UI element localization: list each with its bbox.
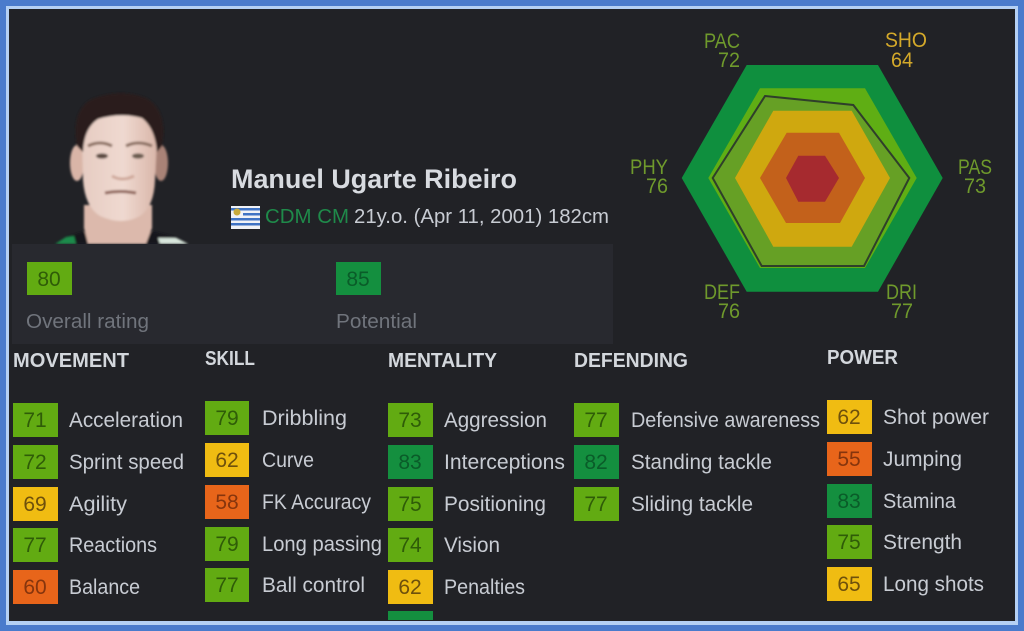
panel: movement: MOVEMENT <box>13 350 129 372</box>
icon: Uruguay flag <box>231 206 260 229</box>
radar label: PHY: PHY <box>630 156 668 179</box>
panel: skill: FK Accuracy <box>262 491 371 514</box>
radar label: PAC: 72 <box>718 49 740 72</box>
panel: skill: 79 <box>215 407 239 430</box>
panel: skill: 62 <box>215 449 239 472</box>
panel: power: 55 <box>837 448 861 471</box>
panel: mentality: Interceptions <box>444 451 565 474</box>
radar label: PHY: 76 <box>646 175 668 198</box>
radar label: PAS <box>958 156 992 198</box>
panel: mentality: Penalties <box>444 576 525 599</box>
panel: defending: Defensive awareness <box>631 409 820 432</box>
panel: mentality: Positioning <box>444 493 546 516</box>
radar label: SHO: 64 <box>891 49 913 72</box>
panel: power: Jumping <box>883 448 962 471</box>
panel: mentality: Aggression <box>444 409 547 432</box>
panel: mentality: Vision <box>444 534 500 557</box>
panel: skill: SKILL <box>205 348 255 370</box>
panel: defending: 77 <box>584 493 608 516</box>
panel: skill: 58 <box>215 491 239 514</box>
radar label: PAS: PAS <box>958 156 992 179</box>
panel: power: Stamina <box>883 490 956 513</box>
overall rating <box>26 262 149 333</box>
panel: mentality: 62 <box>398 576 422 599</box>
panel: skill: Ball control <box>262 574 365 597</box>
panel: movement: Reactions <box>69 534 157 557</box>
radar label: SHO: SHO <box>885 29 927 52</box>
panel: power: 83 <box>837 490 861 513</box>
panel: power: Long shots <box>883 573 984 596</box>
panel: defending: 82 <box>584 451 608 474</box>
player meta line: 21y.o. (Apr 11, 2001) 182cm <box>354 206 609 228</box>
panel: movement: 69 <box>23 493 47 516</box>
radar label: PAC: PAC <box>704 30 740 53</box>
panel: power: POWER <box>827 347 899 369</box>
radar label: DEF <box>704 281 740 323</box>
overall rating: 80 <box>37 268 61 291</box>
radar label: DEF: DEF <box>704 281 740 304</box>
radar label: PHY <box>630 156 668 198</box>
panel: movement: Balance <box>69 576 140 599</box>
panel: movement: 60 <box>23 576 47 599</box>
panel: skill: Dribbling <box>262 407 347 430</box>
potential: 85 <box>346 268 370 291</box>
panel: defending: 77 <box>584 409 608 432</box>
panel: ratings <box>12 244 613 344</box>
radar label: SHO <box>885 29 927 72</box>
panel: movement: 77 <box>23 534 47 557</box>
overall rating: Overall rating <box>26 311 149 333</box>
panel: movement: Sprint speed <box>69 451 184 474</box>
panel: mentality <box>388 350 565 620</box>
panel: movement: 71 <box>23 409 47 432</box>
potential <box>336 262 417 333</box>
radar label: PAC <box>704 30 740 72</box>
player meta line: CDM CM <box>265 206 349 228</box>
panel: skill: 77 <box>215 574 239 597</box>
panel: defending: DEFENDING <box>574 350 688 372</box>
panel: mentality: 73 <box>398 409 422 432</box>
panel: power: Shot power <box>883 406 989 429</box>
panel: power: Strength <box>883 531 962 554</box>
panel: defending: Standing tackle <box>631 451 772 474</box>
radar label: DRI: 77 <box>891 300 913 323</box>
panel: mentality: 75 <box>398 493 422 516</box>
panel: defending: Sliding tackle <box>631 493 753 516</box>
player photo <box>55 93 189 244</box>
panel: defending <box>574 350 820 521</box>
radar label: DRI: DRI <box>886 281 917 304</box>
panel: mentality: MENTALITY <box>388 350 498 372</box>
panel: mentality: 83 <box>398 451 422 474</box>
panel: movement: 72 <box>23 451 47 474</box>
panel: power: 62 <box>837 406 861 429</box>
panel: movement <box>13 350 184 604</box>
panel: power <box>827 347 989 601</box>
potential: Potential <box>336 311 417 333</box>
player meta line <box>231 206 609 229</box>
radar label: DEF: 76 <box>718 300 740 323</box>
panel: movement: Agility <box>69 493 128 516</box>
panel: skill: 79 <box>215 533 239 556</box>
panel: skill: Long passing <box>262 533 382 556</box>
radar label: PAS: 73 <box>964 175 986 198</box>
panel: power: 75 <box>837 531 861 554</box>
panel: power: 65 <box>837 573 861 596</box>
panel: movement: Acceleration <box>69 409 183 432</box>
radar label: DRI <box>886 281 917 323</box>
panel: mentality: 74 <box>398 534 422 557</box>
radar chart <box>682 65 943 292</box>
panel: skill: Curve <box>262 449 314 472</box>
player name: Manuel Ugarte Ribeiro <box>231 164 517 194</box>
panel: skill <box>205 348 382 602</box>
